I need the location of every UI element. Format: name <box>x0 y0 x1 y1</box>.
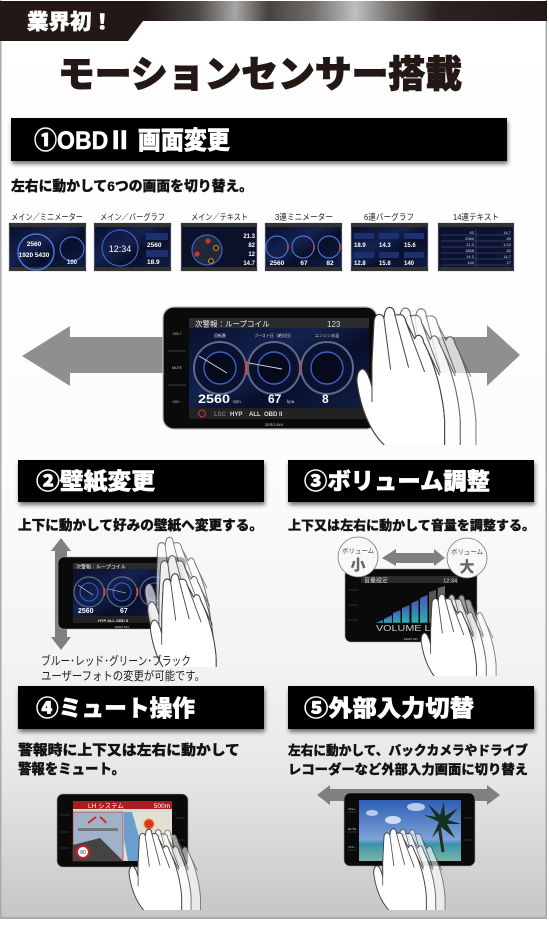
map view <box>124 812 172 861</box>
device: main gauges screen: 123 <box>327 320 341 329</box>
thumbnail: fourteen text: 85 <box>507 236 512 241</box>
note: wallpaper options: ユーザーフォトの変更が可能です。 <box>41 668 205 683</box>
section 2 heading: ②壁紙変更 <box>36 468 155 494</box>
icon: hand gesture, section 5 <box>374 829 445 913</box>
thumbnail: main mini meter: 2560 <box>27 241 42 248</box>
thumbnail: main text: 14.7 <box>243 261 256 267</box>
device: main gauges screen <box>163 307 377 429</box>
device: volume screen <box>345 569 477 642</box>
thumbnail: six bar graph <box>351 212 428 271</box>
thumbnail: fourteen text: 1858 <box>465 248 475 253</box>
section 3 heading <box>288 460 534 502</box>
palm tree <box>424 802 461 852</box>
section 4 heading <box>18 686 264 729</box>
device: external input screen <box>344 793 475 866</box>
thumbnail: triple mini meter: 67 <box>300 260 308 267</box>
note: wallpaper options <box>41 653 205 683</box>
volume bars <box>376 586 445 623</box>
section 1 heading: ①OBDⅡ 画面変更 <box>34 127 230 155</box>
badge: volume small: 小 <box>350 557 366 574</box>
section 5 heading <box>288 686 534 729</box>
thumbnail: fourteen text: 14.2 <box>466 254 475 259</box>
device: volume screen: 音量設定 <box>364 576 388 584</box>
thumbnail: fourteen text: 82 <box>470 230 475 235</box>
device: main gauges screen: rpm <box>233 399 241 404</box>
section 4 description <box>18 742 240 777</box>
thumbnail: fourteen text <box>438 212 514 271</box>
thumbnail: six bar graph: 140 <box>404 261 415 267</box>
device: wallpaper screen: 2560 <box>78 608 94 615</box>
icon: hand gesture, section 4 <box>129 829 200 914</box>
alert header <box>73 801 172 809</box>
device: alert mute screen: 80 <box>80 850 86 856</box>
thumbnail: triple mini meter: 82 <box>326 260 334 267</box>
thumbnail: main bar graph: 18.9 <box>147 259 160 266</box>
device: main gauges screen: エンジン水温 <box>315 332 339 338</box>
thumbnail: fourteen text: 140 <box>467 260 475 265</box>
thumbnail: fourteen text: 14連テキスト <box>453 212 499 222</box>
section 4 description: 警報時に上下又は左右に動かして <box>18 742 240 758</box>
device: main gauges screen: MUTE <box>172 366 183 370</box>
thumbnail: main bar graph: 2560 <box>147 242 162 249</box>
device: external input screen: VOL− <box>348 845 356 849</box>
screen <box>189 318 369 419</box>
badge: volume large: ボリューム <box>451 548 484 556</box>
section 2 description: 上下に動かして好みの壁紙へ変更する。 <box>18 517 263 533</box>
device: volume screen: ZERO 84V <box>404 637 418 641</box>
device: main gauges screen: 8 <box>322 392 329 406</box>
thumbnail: main text <box>181 212 257 271</box>
section 4 description: 警報をミュート。 <box>18 761 125 777</box>
arrow: volume left right <box>382 549 445 566</box>
device: main gauges screen: 67 <box>268 392 282 406</box>
section 3 heading: ③ボリューム調整 <box>304 468 490 494</box>
device: main gauges screen: VOL− <box>172 400 182 404</box>
thumbnail: triple mini meter: 2560 <box>270 260 285 267</box>
device: alert mute screen: 500m <box>154 803 170 810</box>
device: main gauges screen: ALL <box>249 412 261 418</box>
thumbnail: fourteen text: 14.7 <box>503 230 512 235</box>
device: main gauges screen: ブースト圧（絶対圧） <box>254 332 294 338</box>
thumbnails row <box>9 212 514 271</box>
thumbnail: fourteen text: 1:23 <box>503 242 512 247</box>
device: wallpaper screen: ZERO 84V <box>115 625 129 629</box>
icon: hand gesture, section 3 <box>421 594 496 683</box>
device: wallpaper screen: 次警報：ループコイル <box>76 564 126 570</box>
section 2 heading <box>18 460 264 502</box>
device: main gauges screen: OBD II <box>264 412 283 418</box>
thumbnail: main bar graph: 12:34 <box>109 244 131 254</box>
thumbnail: six bar graph: 6連バーグラフ <box>364 212 414 222</box>
section 1 heading <box>11 118 507 161</box>
device: wallpaper screen: 67 <box>120 608 128 615</box>
device: main gauges screen: kpa <box>287 399 295 404</box>
thumbnail: main text: 82 <box>248 243 256 249</box>
badge: volume small <box>338 537 378 577</box>
device: external input screen: VOL+ <box>348 807 356 811</box>
thumbnail: six bar graph: 18.9 <box>354 243 366 249</box>
thumbnail: main mini meter: 100 <box>67 260 78 266</box>
section 5 description <box>288 743 528 777</box>
main title: モーションセンサー搭載 <box>58 54 462 95</box>
device: wallpaper screen: HYP ALL OBD II <box>98 618 128 623</box>
section 5 description: 左右に動かして、バックカメラやドライブ <box>288 743 528 758</box>
thumbnail: six bar graph: 15.6 <box>404 243 416 249</box>
top ribbon with tag <box>0 1 547 41</box>
thumbnail: six bar graph: 12.8 <box>354 261 366 267</box>
thumbnail: main mini meter: 1920 5430 <box>19 252 50 259</box>
thumbnail: fourteen text: 27 <box>507 260 512 265</box>
thumbnail: six bar graph: 14.3 <box>379 243 391 249</box>
device: main gauges screen: LSC <box>214 412 227 418</box>
device: main gauges screen: ZERO 84V <box>265 423 284 427</box>
thumbnail: main text: 21.3 <box>243 234 256 240</box>
device: main gauges screen: 回転数 <box>214 332 226 338</box>
thumbnail: main bar graph: メイン／バーグラフ <box>100 212 165 222</box>
icon: hand gesture, section 1 <box>357 307 476 448</box>
device: main gauges screen: 次警報：ループコイル <box>195 318 270 328</box>
device: volume screen: VOLUME LEVEL <box>376 623 458 633</box>
section 1 description: 左右に動かして6つの画面を切り替え。 <box>11 178 253 194</box>
camera view <box>73 812 123 861</box>
device: wallpaper screen <box>58 557 186 629</box>
thumbnail: fourteen text: 2560 <box>465 236 475 241</box>
thumbnail: main bar graph <box>94 212 171 271</box>
note: wallpaper options: ブルー･レッド･グリーン･ブラック <box>41 653 191 668</box>
thumbnail: main mini meter <box>9 212 86 271</box>
section 3 description: 上下又は左右に動かして音量を調整する。 <box>288 518 535 533</box>
tag text: industry first: 業界初！ <box>27 11 113 34</box>
device: main gauges screen: HYP <box>230 412 242 418</box>
badge: volume large <box>447 538 487 578</box>
device: main gauges screen: 2560 <box>198 392 230 406</box>
arrow: left right motion <box>22 325 520 386</box>
thumbnail: triple mini meter <box>265 212 342 271</box>
thumbnail: triple mini meter: 3連ミニメーター <box>275 212 333 222</box>
section 5 description: レコーダーなど外部入力画面に切り替え <box>288 762 528 777</box>
arrow: up down motion <box>51 538 71 650</box>
device: volume screen: 12:34 <box>443 578 457 584</box>
icon: hand gesture, section 2 <box>145 537 216 678</box>
badge: volume large: 大 <box>459 558 475 576</box>
thumbnail: main text: メイン／テキスト <box>191 212 248 222</box>
thumbnail: fourteen text: 82 <box>507 248 512 253</box>
badge: volume small: ボリューム <box>342 547 375 555</box>
device: alert mute screen <box>57 794 188 867</box>
thumbnail: main mini meter: メイン／ミニメーター <box>11 212 83 222</box>
thumbnail: six bar graph: 15.8 <box>379 261 391 267</box>
section 4 heading: ④ミュート操作 <box>36 695 195 721</box>
section 5 heading: ⑤外部入力切替 <box>304 695 474 721</box>
device: external input screen: MUTE <box>348 827 356 831</box>
thumbnail: fourteen text: 14.7 <box>503 254 512 259</box>
device: main gauges screen: VOL+ <box>172 332 182 336</box>
device: alert mute screen: LH システム <box>88 802 124 810</box>
arrow: input left right <box>317 785 500 805</box>
thumbnail: fourteen text: 21.3 <box>466 242 475 247</box>
thumbnail: main text: 12 <box>248 252 256 258</box>
